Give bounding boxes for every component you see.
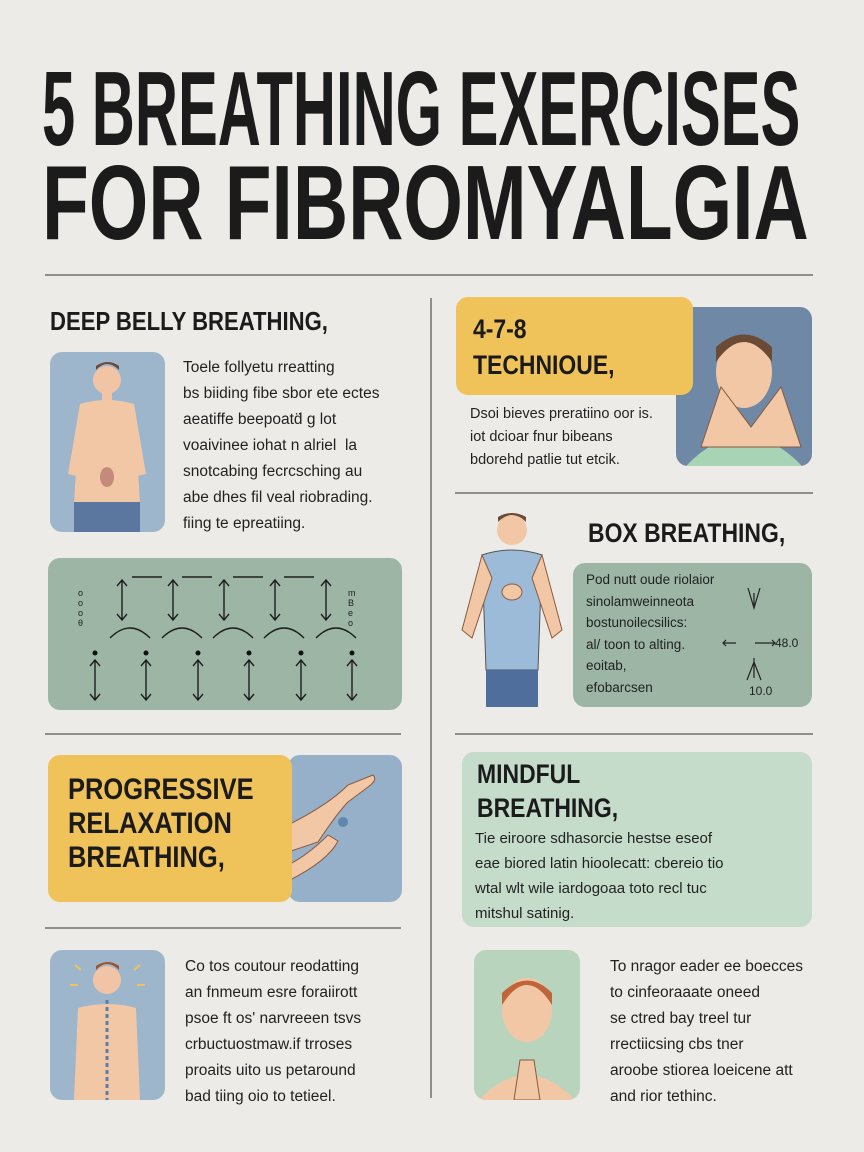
diagram box: box breathing: [573, 563, 812, 707]
text: mindful details: and rior tethinc.: [610, 1088, 717, 1105]
text: deep belly: snotcabing fecrcsching au: [183, 463, 362, 480]
chart: belly breathing wave diagram: θ: [78, 618, 83, 628]
text: 4-7-8: iot dcioar fnur bibeans: [470, 429, 613, 445]
diagram box: box breathing: al/ toon to alting.: [586, 636, 685, 652]
diagram box: box breathing: 48.0: [775, 636, 799, 650]
text: mindful details: se ctred bay treel tur: [610, 1010, 751, 1027]
heading: deep belly: DEEP BELLY BREATHING,: [50, 306, 328, 336]
panel: mindful details: [474, 950, 803, 1105]
text: progressive: proaits uito us petaround: [185, 1062, 356, 1079]
heading box: progressive: BREATHING,: [68, 841, 225, 874]
heading box: 4-7-8: 4-7-8: [473, 314, 527, 344]
panel: box breathing: [462, 513, 812, 707]
text: progressive: bad tiing oio to tetieel.: [185, 1088, 336, 1105]
text: progressive: [185, 958, 361, 1105]
diagram box: box breathing: efobarcsen: [586, 680, 653, 694]
text: deep belly: bs biiding fibe sbor ete ectes: [183, 385, 379, 402]
chart: belly breathing wave diagram: o: [78, 588, 83, 598]
text: progressive: crbuctuostmaw.if trroses: [185, 1036, 352, 1053]
text: deep belly: voaivinee iohat n alriel la: [183, 437, 357, 454]
illustration: calm face: [474, 950, 580, 1100]
text: progressive: Co tos coutour reodatting: [185, 958, 359, 975]
text: mindful: [475, 830, 724, 922]
panel: deep belly breathing: [50, 306, 379, 532]
heading box: 4-7-8: [456, 297, 693, 395]
chart: belly breathing wave diagram: B: [348, 598, 354, 608]
panel: progressive relaxation: [48, 755, 402, 902]
diagram box: box breathing: 10.0: [749, 684, 773, 698]
chart: belly breathing wave diagram: e: [348, 608, 353, 618]
illustration: body scan: [50, 950, 165, 1100]
heading: mindful: BREATHING,: [477, 793, 618, 823]
text: deep belly: Toele follyetu rreatting: [183, 359, 335, 376]
panel: 4-7-8 technique: [456, 297, 812, 468]
chart: belly breathing wave diagram: ο: [348, 618, 353, 628]
panel: progressive details: [50, 950, 361, 1105]
text: mindful: mitshul satinig.: [475, 905, 574, 922]
heading: mindful: MINDFUL: [477, 759, 580, 789]
text: mindful details: rrectiicsing cbs tner: [610, 1036, 744, 1053]
text: 4-7-8: Dsoi bieves preratiino oor is.: [470, 406, 653, 422]
text: 4-7-8: [470, 406, 653, 468]
text: mindful: wtal wlt wile iardogoaa toto recl tuc: [475, 880, 707, 897]
title: [42, 58, 809, 248]
text: mindful details: [610, 958, 803, 1105]
illustration: face with hands: [676, 307, 812, 466]
diagram box: box breathing: Pod nutt oude riolaior: [586, 572, 714, 587]
illustration: hand: [288, 755, 402, 902]
heading: box breathing: BOX BREATHING,: [588, 518, 785, 548]
heading box: 4-7-8: TECHNIOUE,: [473, 350, 615, 380]
illustration: standing person: [462, 513, 562, 707]
illustration: belly: [50, 352, 165, 532]
diagram box: box breathing: sinolamweinneota: [586, 594, 694, 608]
text: deep belly: fiing te epreatiing.: [183, 515, 305, 532]
heading: mindful: [477, 759, 618, 823]
chart: belly breathing wave diagram: m: [348, 588, 356, 598]
text: deep belly: [183, 359, 379, 532]
heading box: progressive: [48, 755, 292, 902]
text: mindful details: To nragor eader ee boecces: [610, 958, 803, 975]
text: 4-7-8: bdorehd patlie tut etcik.: [470, 452, 620, 468]
diagram box: box breathing: eoitab,: [586, 658, 627, 673]
text: progressive: psoe ft os' narvreeen tsvs: [185, 1010, 361, 1027]
diagram box: box breathing: bostunoilecsilics:: [586, 615, 687, 630]
text: deep belly: abe dhes fil veal riobrading.: [183, 489, 373, 506]
panel: mindful breathing: [462, 752, 812, 927]
chart: belly breathing wave diagram: o: [78, 598, 83, 608]
text: mindful: Tie eiroore sdhasorcie hestse eseof: [475, 830, 712, 847]
text: mindful: eae biored latin hioolecatt: cbereio tio: [475, 855, 724, 872]
heading box: progressive: RELAXATION: [68, 807, 232, 840]
chart: belly breathing wave diagram: o: [78, 608, 83, 618]
text: mindful details: to cinfeoraaate oneed: [610, 984, 760, 1001]
chart: belly breathing wave diagram: [48, 558, 402, 710]
heading box: progressive: PROGRESSIVE: [68, 773, 254, 806]
text: mindful details: aroobe stiorea loeicene att: [610, 1062, 793, 1079]
text: deep belly: aeatiffe beepoatd̈ g lot: [183, 411, 336, 428]
text: progressive: an fnmeum esre foraiirott: [185, 984, 357, 1001]
